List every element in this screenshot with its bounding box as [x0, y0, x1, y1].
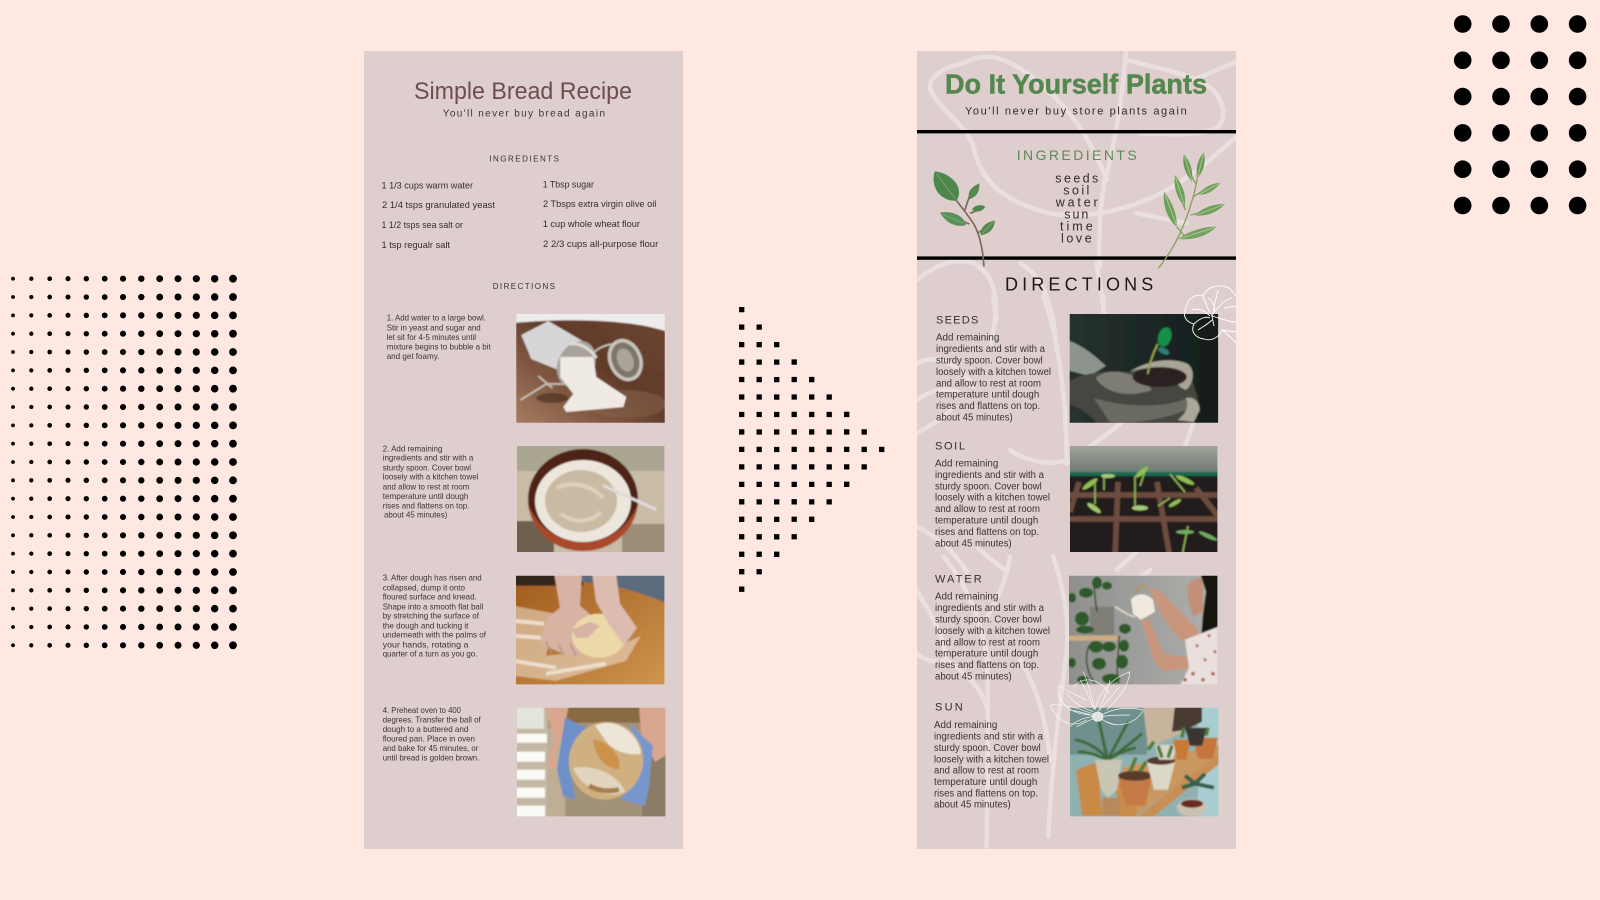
step 4 text: [383, 706, 481, 762]
ingredients heading: INGREDIENTS: [489, 155, 559, 164]
ingredients list right: 2 Tbsps extra virgin olive oil: [543, 199, 656, 210]
step 3 text: [383, 574, 487, 659]
step 2 text: about 45 minutes): [384, 511, 448, 520]
soil text: loosely with a kitchen towel: [935, 493, 1050, 504]
soil text: Add remaining: [935, 459, 998, 470]
panel: plants guide: [917, 43, 1240, 849]
step 1 text: Stir in yeast and sugar and: [387, 323, 481, 332]
ingredients list right: [543, 179, 658, 250]
decorative halftone dots: left: [13, 279, 233, 646]
soil text: [935, 459, 1050, 549]
step 3 text: 3. After dough has risen and: [383, 574, 482, 583]
soil text: and allow to rest at room: [935, 504, 1040, 515]
seeds text: ingredients and stir with a: [936, 344, 1046, 355]
sun text: and allow to rest at room: [934, 766, 1039, 777]
step 1 text: and get foamy.: [387, 352, 439, 361]
photo: seedling tray: [1070, 446, 1218, 552]
photo: kneading dough: [513, 573, 668, 688]
soil text: ingredients and stir with a: [935, 470, 1045, 481]
seeds text: temperature until dough: [936, 390, 1039, 401]
step 3 text: by stretching the surface of: [383, 612, 480, 621]
seeds text: [936, 333, 1051, 423]
directions heading: DIRECTIONS: [493, 282, 555, 291]
sun text: [934, 720, 1049, 811]
photo: baked loaf: [514, 705, 669, 820]
soil text: temperature until dough: [935, 515, 1038, 526]
ingredient words: soil: [1063, 184, 1089, 198]
photo: potted plants on shelf: [1067, 705, 1222, 820]
step 4 text: until bread is golden brown.: [383, 753, 479, 762]
panel: bread recipe: [364, 51, 683, 849]
black divider top: [917, 130, 1236, 133]
icon: right leaf sprig: [1158, 152, 1225, 268]
step 3 text: collapsed, dump it onto: [383, 583, 465, 592]
background flower pattern: [917, 43, 1240, 847]
icon: white outline flower lower: [1050, 672, 1143, 727]
plants subtitle: You'll never buy store plants again: [965, 105, 1187, 117]
soil text: about 45 minutes): [935, 538, 1012, 549]
water heading: WATER: [935, 574, 982, 586]
ingredient words: sun: [1064, 208, 1088, 222]
seeds text: loosely with a kitchen towel: [936, 367, 1051, 378]
ingredients list right: 2 2/3 cups all-purpose flour: [543, 239, 658, 250]
ingredient words: water: [1055, 196, 1098, 210]
step 3 text: your hands, rotating a: [383, 640, 469, 649]
water text: loosely with a kitchen towel: [935, 626, 1050, 637]
water text: ingredients and stir with a: [935, 603, 1045, 614]
bread subtitle: You'll never buy bread again: [443, 108, 605, 120]
seeds text: about 45 minutes): [936, 412, 1013, 423]
arrow made of square dots: [742, 307, 882, 592]
seeds text: rises and flattens on top.: [936, 401, 1040, 412]
water text: sturdy spoon. Cover bowl: [935, 615, 1042, 626]
ingredients heading green: INGREDIENTS: [1017, 147, 1137, 163]
water text: about 45 minutes): [935, 671, 1012, 682]
step 4 text: and bake for 45 minutes, or: [383, 744, 479, 753]
ingredients list left: 1 1/2 tsps sea salt or: [382, 220, 463, 231]
step 2 text: [383, 444, 479, 520]
water text: rises and flattens on top.: [935, 660, 1039, 671]
step 2 text: 2. Add remaining: [383, 444, 443, 453]
step 1 text: 1. Add water to a large bowl.: [387, 314, 486, 323]
step 2 text: and allow to rest at room: [383, 482, 470, 491]
photo: flour in bowl: [517, 446, 664, 552]
ingredients list left: 2 1/4 tsps granulated yeast: [382, 200, 495, 211]
step 3 text: underneath with the palms of: [383, 631, 487, 640]
soil heading: SOIL: [935, 440, 965, 452]
step 2 text: sturdy spoon. Cover bowl: [383, 463, 471, 472]
ingredient words: love: [1061, 232, 1092, 246]
step 4 text: degrees. Transfer the ball of: [383, 715, 481, 724]
step 1 text: let sit for 4-5 minutes until: [387, 333, 476, 342]
sun text: loosely with a kitchen towel: [934, 754, 1049, 765]
sun text: sturdy spoon. Cover bowl: [934, 743, 1041, 754]
seeds text: and allow to rest at room: [936, 378, 1041, 389]
step 4 text: floured pan. Place in oven: [383, 734, 475, 743]
photo: seedling in hands: [1067, 311, 1222, 426]
step 3 text: floured surface and knead.: [383, 593, 477, 602]
water text: Add remaining: [935, 592, 998, 603]
sun text: ingredients and stir with a: [934, 731, 1044, 742]
water text: [935, 592, 1050, 682]
soil text: rises and flattens on top.: [935, 527, 1039, 538]
photo: woman watering plants: [1066, 573, 1221, 688]
sun text: rises and flattens on top.: [934, 788, 1038, 799]
ingredient words: time: [1060, 220, 1093, 234]
step 3 text: Shape into a smooth flat ball: [383, 602, 484, 611]
sun text: about 45 minutes): [934, 800, 1011, 811]
ingredients list right: 1 cup whole wheat flour: [543, 219, 640, 230]
ingredient words: [1055, 172, 1098, 246]
step 1 text: [387, 314, 491, 361]
seeds text: sturdy spoon. Cover bowl: [936, 355, 1043, 366]
photo: flour jar: [513, 311, 668, 426]
step 1 text: mixture begins to bubble a bit: [387, 342, 491, 351]
black divider bottom: [917, 256, 1236, 260]
ingredients list right: 1 Tbsp sugar: [543, 179, 594, 190]
step 3 text: quarter of a turn as you go.: [383, 650, 477, 659]
decorative dots: top right: [1463, 24, 1578, 206]
step 3 text: the dough and tucking it: [383, 621, 469, 630]
soil text: sturdy spoon. Cover bowl: [935, 481, 1042, 492]
sun text: Add remaining: [934, 720, 997, 731]
seeds text: Add remaining: [936, 333, 999, 344]
step 2 text: ingredients and stir with a: [383, 454, 474, 463]
sun heading: SUN: [935, 702, 963, 714]
bread title: Simple Bread Recipe: [414, 78, 632, 105]
ingredients list left: 1 tsp regualr salt: [382, 240, 450, 251]
seeds heading: SEEDS: [936, 314, 978, 326]
step 4 text: 4. Preheat oven to 400: [383, 706, 461, 715]
step 2 text: rises and flattens on top.: [383, 501, 469, 510]
sun text: temperature until dough: [934, 777, 1037, 788]
step 2 text: loosely with a kitchen towel: [383, 473, 479, 482]
ingredient words: seeds: [1055, 172, 1098, 186]
plants title: Do It Yourself Plants: [945, 68, 1207, 99]
directions heading large: DIRECTIONS: [1005, 275, 1153, 295]
water text: temperature until dough: [935, 649, 1038, 660]
water text: and allow to rest at room: [935, 637, 1040, 648]
step 2 text: temperature until dough: [383, 492, 469, 501]
ingredients list left: [382, 180, 495, 251]
ingredients list left: 1 1/3 cups warm water: [382, 180, 473, 191]
icon: left leaf sprig: [934, 171, 995, 267]
step 4 text: dough to a buttered and: [383, 725, 469, 734]
icon: white outline flower top right: [1184, 286, 1236, 343]
